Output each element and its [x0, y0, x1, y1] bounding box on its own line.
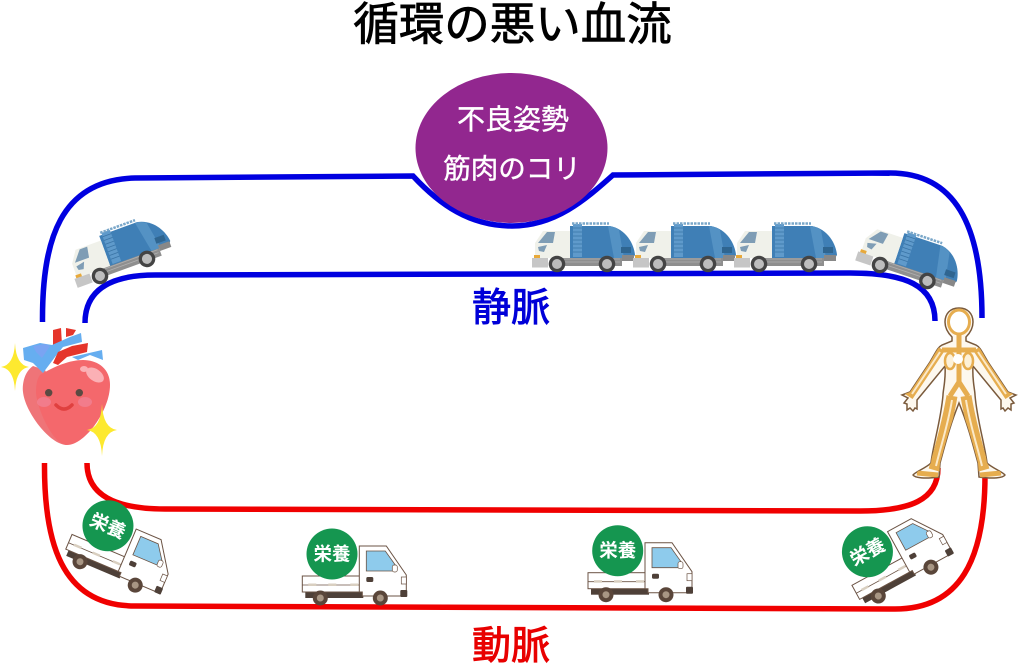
badge: nutrition: 栄養: [87, 509, 129, 543]
badge: nutrition: 栄養: [313, 544, 351, 564]
icon: human body with blood vessels: [902, 308, 1016, 478]
icon: garbage truck tilted right: [854, 219, 967, 298]
icon: garbage truck 3 in queue: [734, 224, 837, 272]
icon: sparkle lower right: [87, 404, 117, 456]
icon: nutrition truck tilted left: [61, 491, 187, 603]
vein outer line: [42, 173, 982, 322]
icon: nutrition truck tilted right: [829, 493, 958, 611]
label: artery: 動脈: [472, 625, 550, 668]
artery inner line: [87, 463, 938, 511]
callout: poor posture and muscle stiffness: 不良姿勢: [457, 104, 569, 135]
label: vein: 静脈: [472, 287, 550, 330]
icon: sparkle upper left: [1, 343, 29, 391]
icon: garbage truck tilted left: [63, 211, 176, 292]
icon: nutrition truck level 2: [588, 525, 693, 602]
vein inner line: [85, 273, 935, 323]
icon: smiling heart: [23, 328, 110, 445]
badge: nutrition: 栄養: [846, 534, 889, 570]
icon: nutrition truck level 1: [302, 528, 407, 606]
badge: nutrition: 栄養: [599, 540, 636, 561]
callout: poor posture and muscle stiffness: [416, 73, 608, 223]
title: 循環の悪い血流: [353, 0, 672, 50]
artery outer line: [44, 463, 985, 609]
icon: garbage truck 2 in queue: [633, 224, 736, 272]
icon: garbage truck 1 in queue: [532, 224, 635, 272]
callout: poor posture and muscle stiffness: 筋肉のコリ: [443, 153, 581, 184]
